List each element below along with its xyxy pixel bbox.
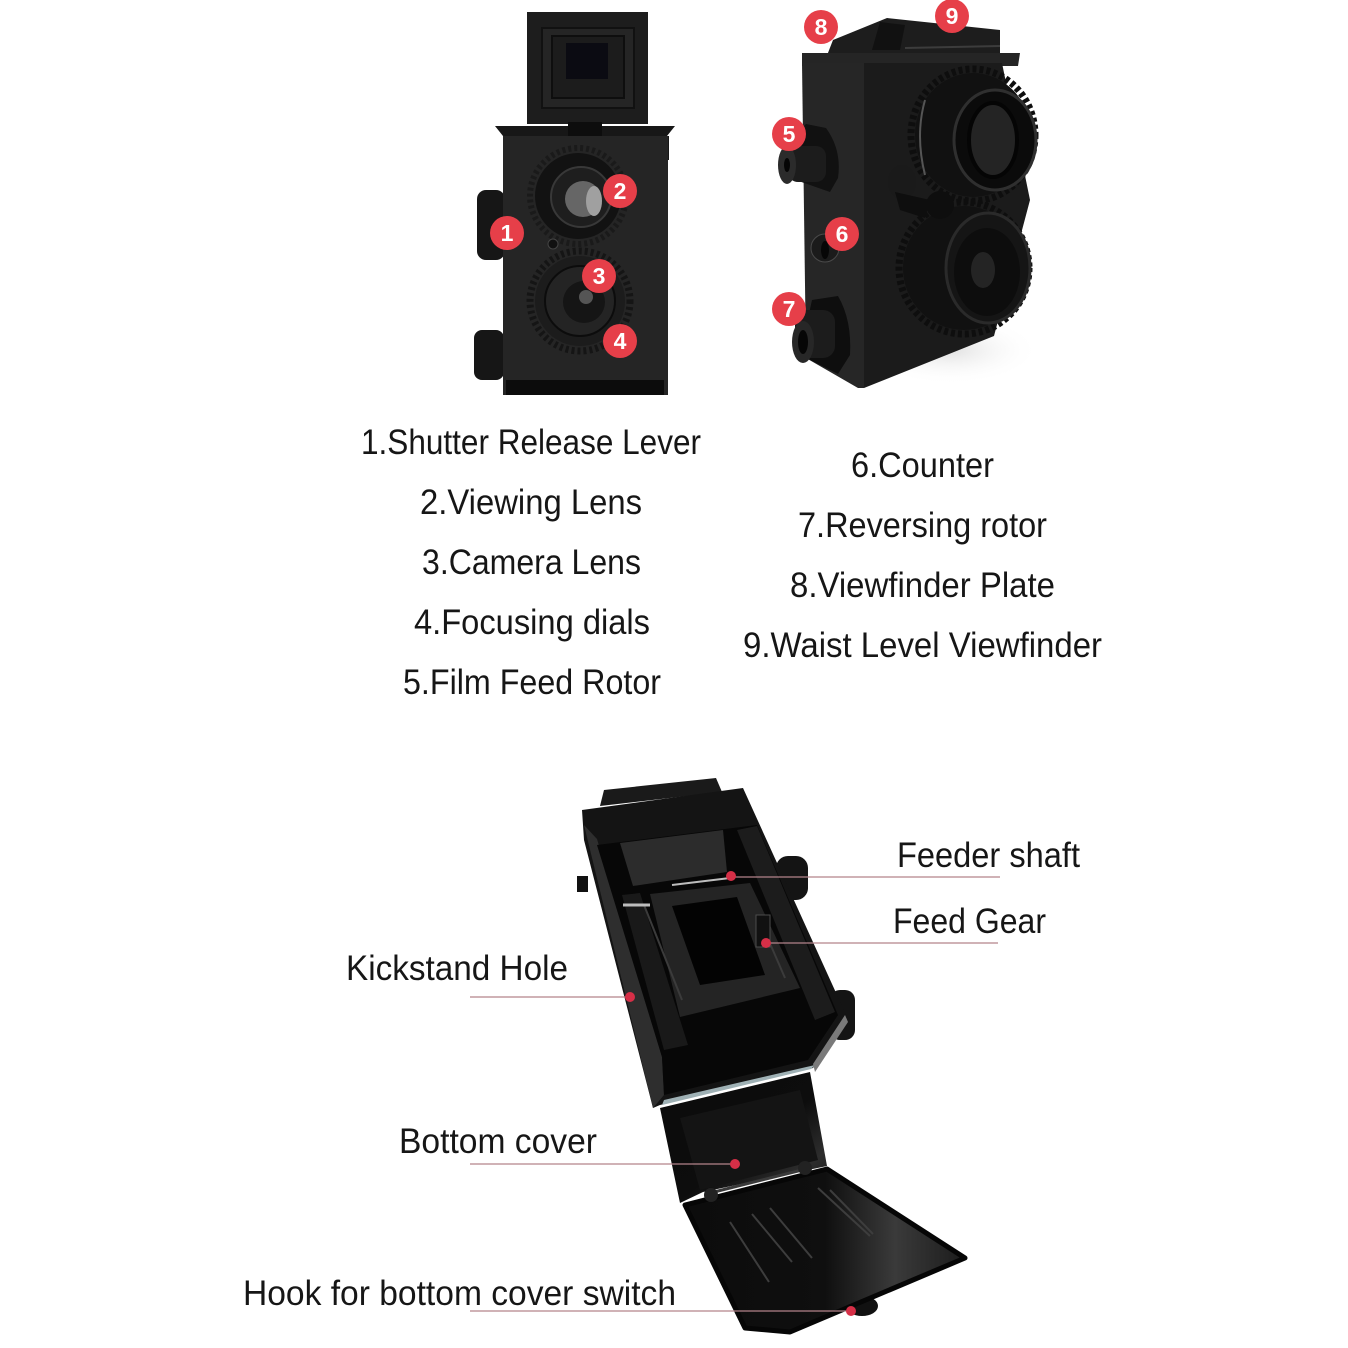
badge 4 <box>603 324 637 358</box>
badge 1 <box>490 216 524 250</box>
top rim <box>495 126 675 160</box>
parts list left column: 2.Viewing Lens <box>420 483 642 522</box>
outer shell <box>582 788 847 1108</box>
focus lever <box>888 165 954 219</box>
feed gear <box>756 915 770 947</box>
counter window <box>811 234 839 262</box>
badge 9 <box>935 0 969 33</box>
callout: Hook for bottom cover switch <box>243 1274 856 1316</box>
bottom cover upper section <box>660 1072 827 1203</box>
camera numbered badges <box>490 0 969 358</box>
parts list left column <box>361 423 701 702</box>
front face <box>864 63 1030 388</box>
parts list right column: 6.Counter <box>851 446 994 485</box>
badge 5: 5 <box>783 121 796 147</box>
parts list right column: 7.Reversing rotor <box>798 506 1047 545</box>
callout: Feeder shaft: Feeder shaft <box>897 836 1080 875</box>
parts list right column <box>743 446 1102 665</box>
badge 8: 8 <box>815 14 828 40</box>
badge 1: 1 <box>501 220 514 246</box>
center screw <box>548 239 558 249</box>
bottom cover lower section <box>685 1161 965 1332</box>
camera angled view <box>778 18 1040 388</box>
badge 6: 6 <box>836 221 848 247</box>
parts list left column: 4.Focusing dials <box>414 603 650 642</box>
film plate <box>623 878 800 1017</box>
callout: Hook for bottom cover switch: Hook for bottom cover switch <box>243 1274 676 1313</box>
badge 8 <box>804 10 838 44</box>
upper chamber panel <box>620 830 727 886</box>
lower lens gear <box>899 202 1030 334</box>
badge 2 <box>603 174 637 208</box>
lower bright edge <box>662 1065 815 1105</box>
side face <box>802 63 864 388</box>
parts list left column: 1.Shutter Release Lever <box>361 423 701 462</box>
callout: Bottom cover <box>399 1122 740 1169</box>
reversing knob <box>792 296 850 374</box>
rear knobs <box>776 856 855 1040</box>
cover switch hook <box>846 1296 878 1316</box>
parts list left column: 5.Film Feed Rotor <box>403 663 661 702</box>
callout: Kickstand Hole <box>346 949 635 1002</box>
badge 9: 9 <box>946 3 958 29</box>
callout: Kickstand Hole: Kickstand Hole <box>346 949 568 988</box>
viewfinder lid <box>826 18 1000 58</box>
top hinge <box>600 778 722 806</box>
badge 2: 2 <box>614 178 626 204</box>
right rail <box>737 826 835 1020</box>
camera open interior view <box>577 778 965 1332</box>
top rim <box>802 53 1020 66</box>
badge 7 <box>772 292 806 326</box>
viewfinder flap <box>527 12 648 124</box>
callout: Feed Gear: Feed Gear <box>893 902 1046 941</box>
dark interior <box>597 825 838 1095</box>
parts list left column: 3.Camera Lens <box>422 543 641 582</box>
film knob <box>778 124 839 192</box>
callout: Feeder shaft <box>726 836 1080 881</box>
body <box>503 136 668 395</box>
badge 4: 4 <box>614 328 627 354</box>
upper lens gear <box>911 69 1036 201</box>
left rail <box>622 893 688 1050</box>
badge 3 <box>582 259 616 293</box>
taking lens <box>530 251 630 351</box>
badge 7: 7 <box>783 296 795 322</box>
camera front view <box>474 12 675 395</box>
badge 5 <box>772 117 806 151</box>
callout: Feed Gear <box>761 902 1046 948</box>
parts list right column: 8.Viewfinder Plate <box>790 566 1055 605</box>
callout: Bottom cover: Bottom cover <box>399 1122 597 1161</box>
left side wall <box>584 825 664 1108</box>
side knobs <box>474 190 505 380</box>
parts list right column: 9.Waist Level Viewfinder <box>743 626 1102 665</box>
viewing lens <box>530 148 626 244</box>
side tab <box>577 876 588 892</box>
badge 6 <box>825 217 859 251</box>
badge 3: 3 <box>593 263 605 289</box>
